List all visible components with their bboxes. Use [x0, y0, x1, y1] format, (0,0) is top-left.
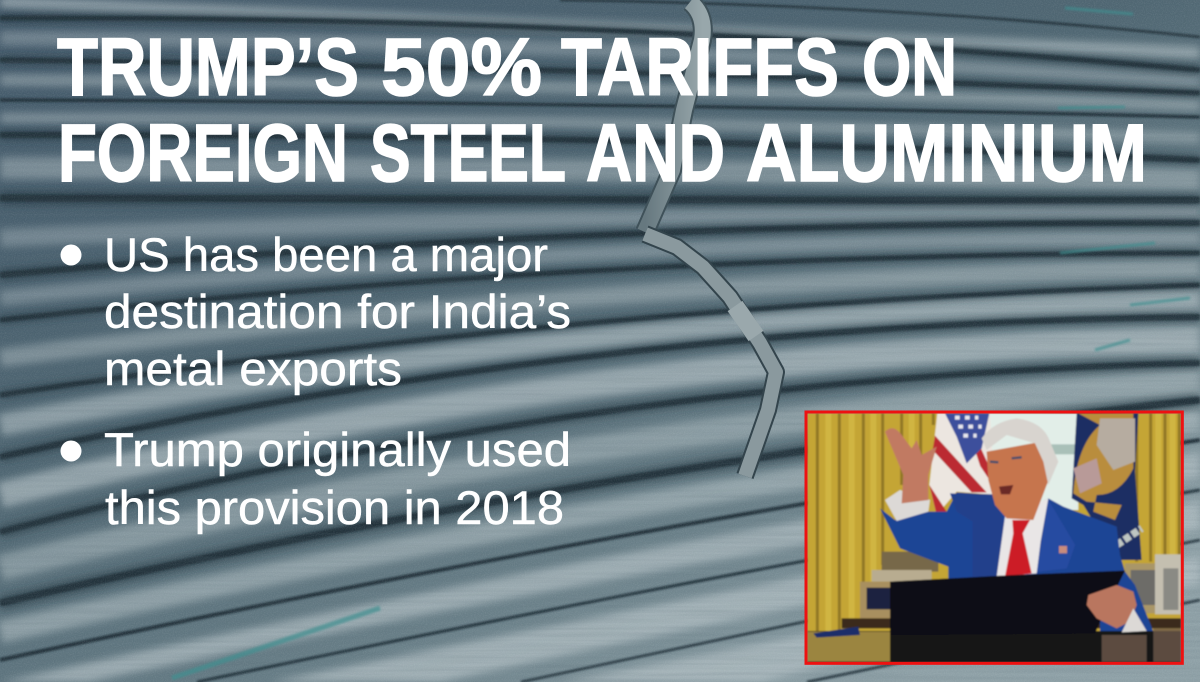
curtains	[808, 414, 1181, 632]
suit body	[880, 492, 1153, 632]
title: FOREIGN	[58, 108, 348, 199]
title: STEEL	[370, 108, 566, 199]
picture frames	[882, 552, 938, 572]
red frame	[806, 412, 1182, 663]
title	[57, 22, 1147, 199]
bullet: metal exports: metal exports	[104, 342, 402, 395]
pen	[813, 627, 860, 638]
bullet: 2018 provision	[60, 423, 571, 534]
photo inset: speaker at desk	[806, 412, 1182, 663]
window	[988, 413, 1078, 510]
title: TARIFFS	[561, 22, 839, 113]
american flag	[929, 413, 995, 515]
title: 50%	[381, 22, 542, 113]
title: ON	[862, 22, 957, 113]
seal flag	[1072, 413, 1142, 560]
bullet: metal exports: destination for India’s	[104, 285, 571, 338]
black folder	[890, 571, 1125, 635]
desk	[807, 631, 1181, 663]
cuff and raised hand	[885, 490, 930, 521]
right hand	[1087, 585, 1137, 628]
title: AND	[586, 108, 725, 199]
bullet: metal exports: US has been a major	[104, 228, 548, 281]
bullet: 2018 provision: Trump originally used	[104, 423, 571, 476]
shirt and tie	[997, 498, 1048, 577]
head and hair	[987, 442, 1057, 520]
bullet: 2018 provision: this provision in 2018	[105, 481, 564, 534]
bullet: metal exports	[60, 228, 571, 395]
steel strapping band	[645, 2, 776, 476]
title: TRUMP’S	[57, 22, 359, 113]
